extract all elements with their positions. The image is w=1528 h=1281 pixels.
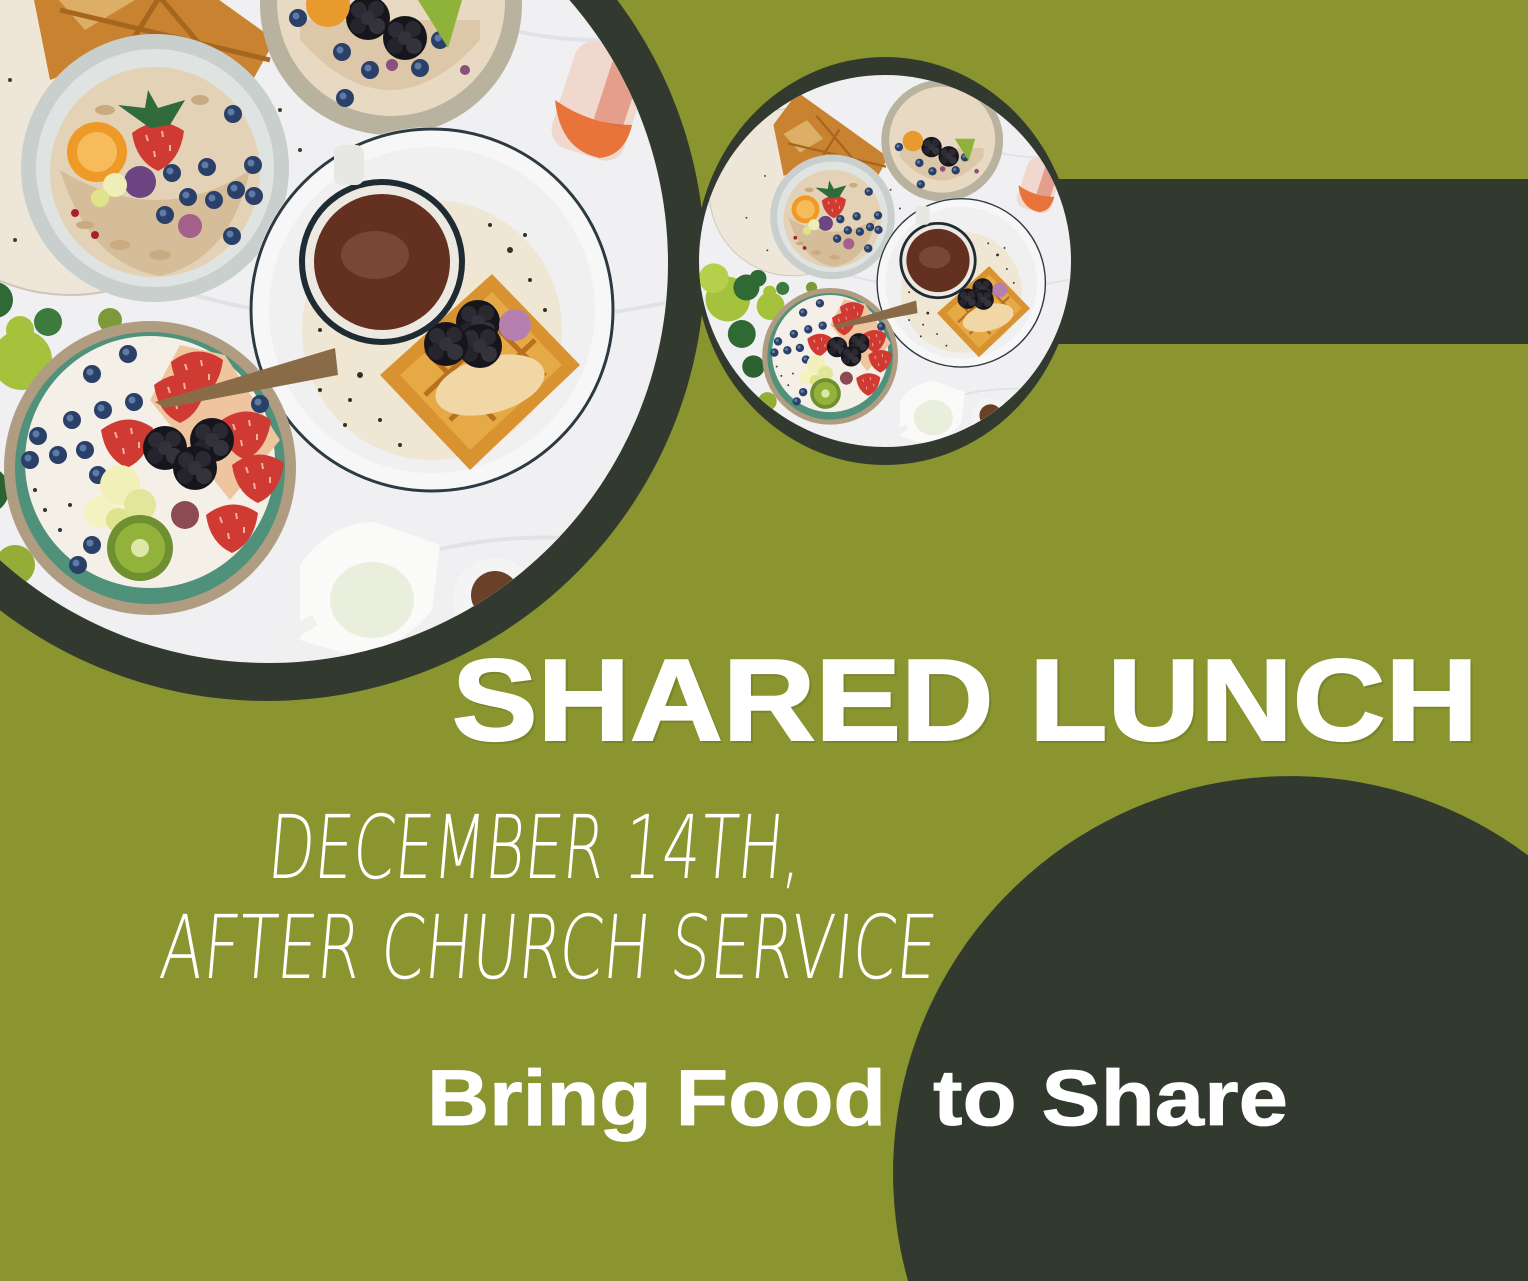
dark circle bottom right [893, 776, 1528, 1281]
call to action: to Share [933, 1053, 1288, 1142]
large food photo circle [0, 0, 705, 701]
date and time text: DECEMBER 14TH, [264, 796, 807, 899]
title: SHARED LUNCH [452, 635, 1478, 765]
small food photo circle [695, 57, 1077, 465]
date and time text: AFTER CHURCH SERVICE [156, 896, 941, 999]
title: SHARED LUNCH [454, 637, 1480, 767]
date and time text [156, 796, 941, 999]
dark horizontal bar [1050, 179, 1528, 344]
call to action: Bring Food [427, 1053, 886, 1142]
call to action [427, 1053, 1288, 1142]
